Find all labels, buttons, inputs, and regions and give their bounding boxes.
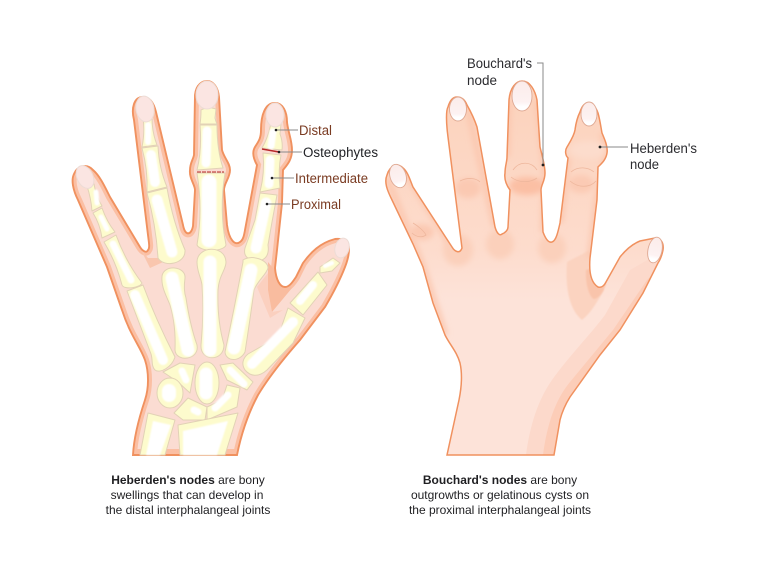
thumb bones bbox=[320, 258, 340, 273]
caption: Bouchard's nodes: Bouchard's nodes are bony bbox=[423, 473, 577, 487]
caption: Heberden's nodes: swellings that can develop in bbox=[111, 488, 263, 502]
index finger bones bbox=[262, 122, 282, 150]
left hand: skeleton view bbox=[73, 81, 351, 456]
label: Heberden's node bbox=[599, 140, 697, 172]
bone highlights bbox=[96, 125, 332, 412]
ulna bbox=[140, 413, 175, 455]
fingernails bbox=[387, 81, 665, 264]
right hand: external view bbox=[386, 81, 665, 460]
knuckle creases bbox=[412, 163, 596, 237]
right hand skin bbox=[386, 81, 663, 455]
label: Heberden's node: Heberden's bbox=[630, 140, 697, 156]
finger and hand bones bbox=[87, 108, 340, 455]
radius and ulna highlights bbox=[146, 421, 228, 455]
label: Bouchard's node: node bbox=[467, 72, 497, 88]
radius bbox=[178, 413, 238, 455]
label: Intermediate: Intermediate bbox=[295, 171, 368, 186]
right hand outline bbox=[386, 81, 663, 455]
label: Osteophytes: Osteophytes bbox=[303, 145, 378, 160]
fingernails bbox=[73, 81, 351, 259]
left hand outline bbox=[73, 81, 349, 455]
label: Heberden's node: node bbox=[630, 156, 659, 172]
label: Bouchard's node bbox=[467, 55, 544, 166]
osteophyte on middle finger bbox=[197, 171, 224, 173]
osteophyte on index finger bbox=[262, 149, 279, 152]
label: Bouchard's node: Bouchard's bbox=[467, 55, 532, 71]
bone labels bbox=[266, 123, 378, 212]
infographic bbox=[72, 58, 696, 516]
left hand skin bbox=[73, 81, 349, 455]
metacarpal bones bbox=[225, 258, 268, 360]
label: Proximal: Proximal bbox=[291, 197, 341, 212]
right hand shading bbox=[387, 100, 665, 460]
label: Distal: Distal bbox=[299, 123, 332, 138]
pinky finger bones bbox=[87, 184, 102, 211]
left hand shading bbox=[73, 81, 349, 456]
node labels bbox=[467, 55, 697, 172]
caption: Heberden's nodes: the distal interphalangeal joints bbox=[106, 503, 270, 517]
osteophyte marks bbox=[197, 149, 279, 172]
middle finger bones bbox=[200, 108, 217, 124]
ring finger bones bbox=[142, 116, 157, 147]
caption: Heberden's nodes: Heberden's nodes are bony bbox=[111, 473, 265, 487]
caption: Bouchard's nodes: the proximal interphalangeal joints bbox=[409, 503, 591, 517]
caption: Bouchard's nodes: outgrowths or gelatinous cysts on bbox=[411, 488, 589, 502]
carpal bones bbox=[163, 363, 195, 393]
